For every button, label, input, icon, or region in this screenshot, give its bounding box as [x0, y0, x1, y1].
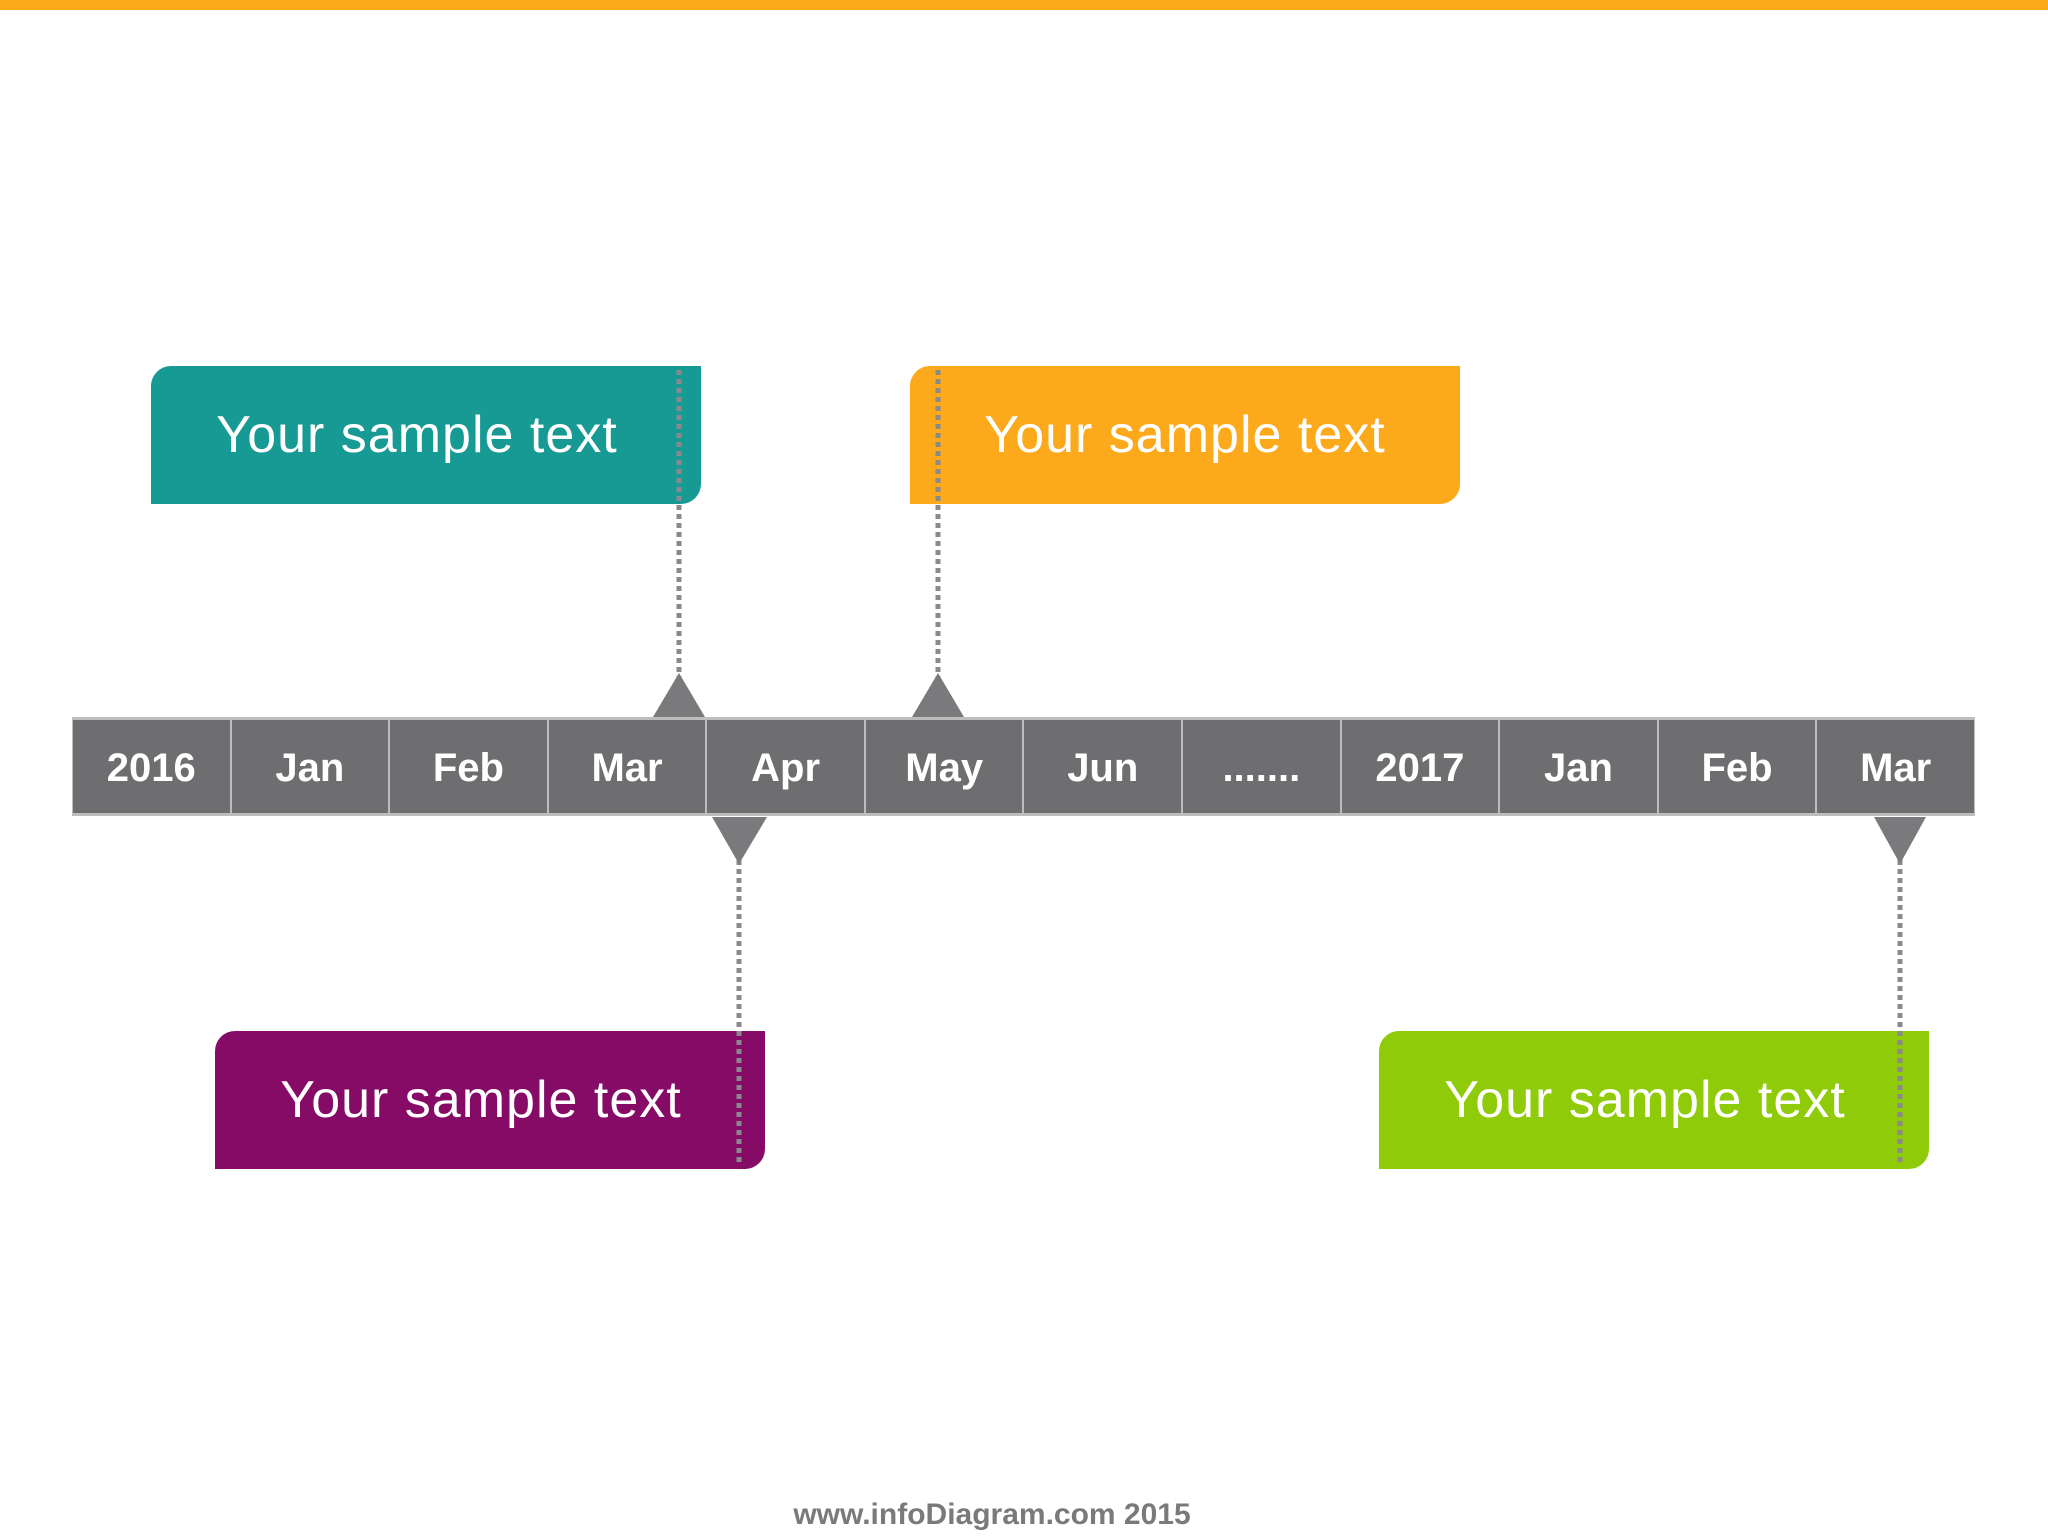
- callout: orange: [910, 366, 1460, 504]
- timeline bar: Jun: [1067, 746, 1138, 790]
- callout: green: [1379, 1031, 1929, 1169]
- timeline bar: 2016: [107, 746, 196, 790]
- timeline bar: Apr: [751, 746, 820, 790]
- timeline bar: Jan: [1544, 746, 1613, 790]
- timeline bar: [72, 717, 1975, 816]
- timeline bar: Mar: [591, 746, 663, 790]
- timeline bar: May: [905, 746, 983, 790]
- timeline bar: Jan: [275, 746, 344, 790]
- timeline bar: Feb: [1702, 746, 1773, 790]
- callout: purple: Your sample text: [280, 1071, 682, 1129]
- footer: www.infoDiagram.com 2015: [793, 1498, 1191, 1531]
- timeline bar: Mar: [1860, 746, 1931, 790]
- top accent bar: [0, 0, 2048, 10]
- callout: purple: [215, 1031, 765, 1169]
- callout: green: Your sample text: [1444, 1071, 1846, 1129]
- timeline bar: .......: [1222, 746, 1300, 790]
- timeline bar: 2017: [1375, 746, 1464, 790]
- callout: teal: Your sample text: [216, 406, 618, 464]
- callout: orange: Your sample text: [984, 406, 1386, 464]
- timeline bar: Feb: [433, 746, 504, 790]
- callout: teal: [151, 366, 701, 504]
